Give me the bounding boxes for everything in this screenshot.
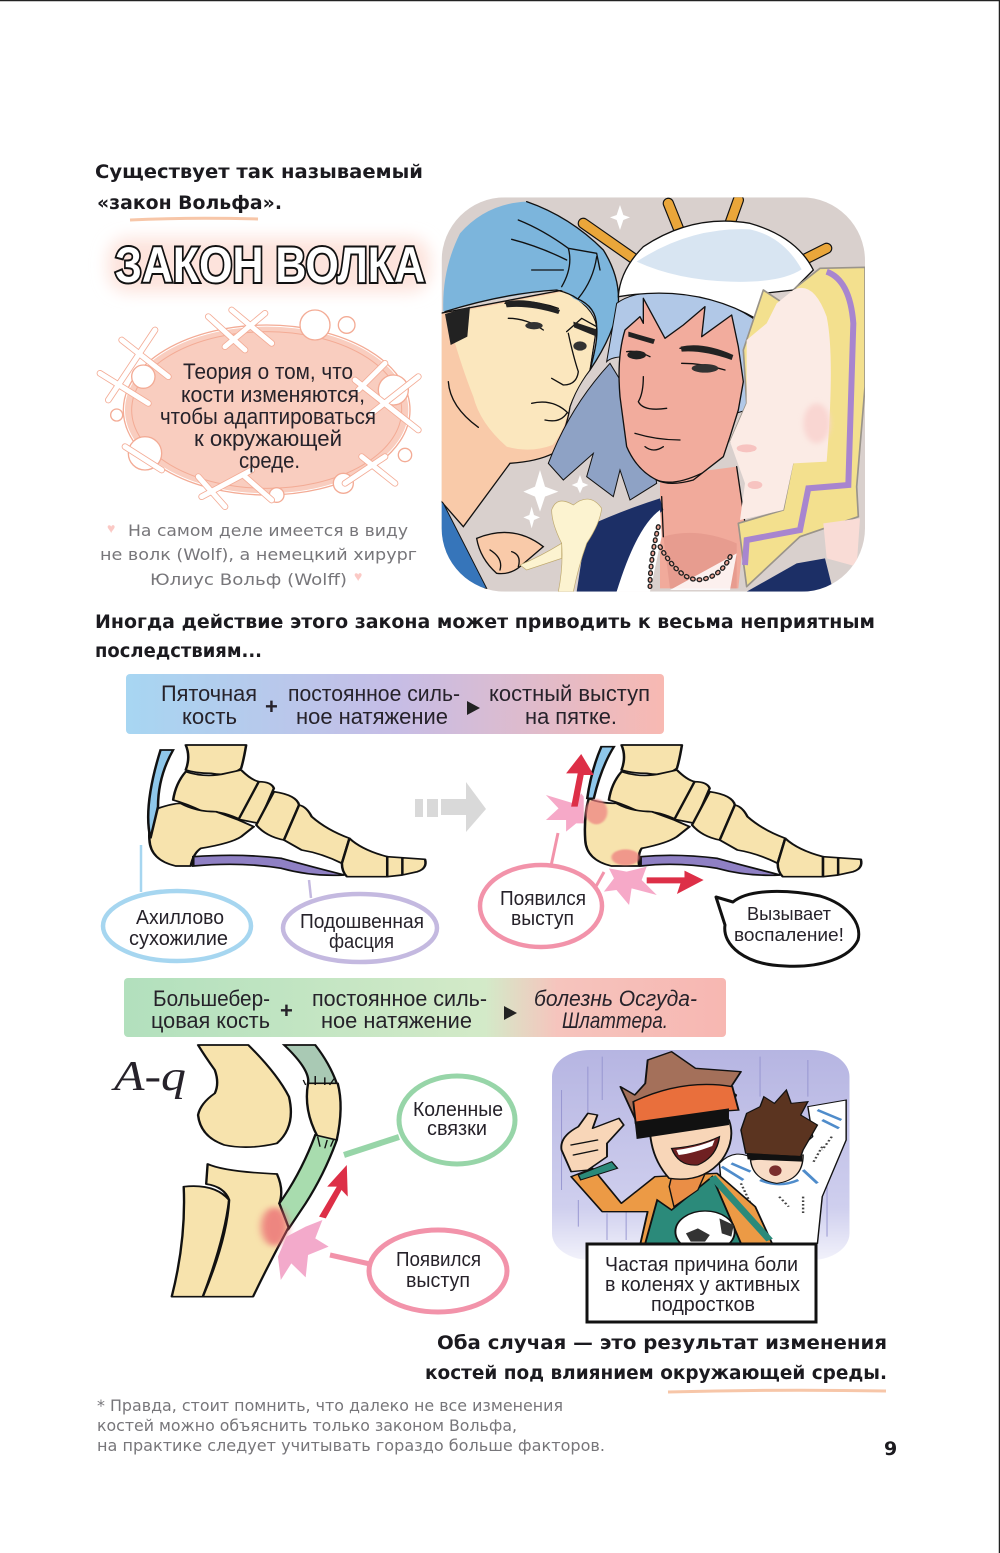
- definition text: к окружающей: [194, 426, 342, 451]
- footnote: на практике следует учитывать гораздо больше факторов.: [97, 1436, 605, 1455]
- conclusion: костей под влиянием окружающей среды.: [425, 1362, 887, 1384]
- formula banner: heel: [126, 674, 664, 734]
- label: achilles tendon: [103, 891, 251, 961]
- left man: [440, 202, 618, 588]
- arrow between feet: [415, 782, 486, 832]
- intro heading: «закон Вольфа».: [97, 192, 282, 214]
- intro heading: Существует так называемый: [95, 161, 423, 183]
- label: plantar fascia: [283, 894, 437, 962]
- intro heading: [95, 161, 423, 220]
- label: knee ligaments: связки: [427, 1118, 487, 1140]
- note about Wolff: Юлиус Вольф (Wolff): [150, 570, 347, 589]
- label: knee spur appeared: Появился: [396, 1249, 481, 1271]
- formula banner: heel: ное натяжение: [296, 704, 448, 729]
- definition text: кости изменяются,: [181, 382, 365, 407]
- footnote: * Правда, стоит помнить, что далеко не все изменения: [97, 1396, 563, 1415]
- caption box: Частая причина боли: [605, 1254, 798, 1276]
- label: achilles tendon: сухожилие: [129, 928, 228, 950]
- conclusion: [425, 1332, 887, 1392]
- bone-pattern ellipse with definition: [100, 310, 418, 507]
- right man: [548, 292, 833, 592]
- afterimage silhouette: [730, 267, 865, 587]
- label: plantar fascia: фасция: [329, 931, 394, 953]
- footnote: костей можно объяснить только законом Вольфа,: [97, 1416, 517, 1435]
- label: knee ligaments: Коленные: [413, 1099, 503, 1121]
- page number: 9: [884, 1438, 897, 1460]
- conclusion: Оба случая — это результат изменения: [437, 1332, 887, 1354]
- speech bubble: inflammation: воспаление!: [734, 925, 844, 945]
- spiked hat: [583, 200, 827, 320]
- caption box: в коленях у активных: [605, 1274, 800, 1296]
- label: knee spur appeared: выступ: [406, 1270, 470, 1292]
- formula banner: knee: ное натяжение: [321, 1008, 472, 1033]
- formula banner: heel: на пятке.: [525, 704, 617, 729]
- leader: ligament: [344, 1137, 399, 1155]
- first boy: [561, 1052, 772, 1252]
- formula banner: knee: Шлаттера.: [562, 1008, 668, 1033]
- formula banner: heel: кость: [182, 704, 237, 729]
- note about Wolff: ♥: [354, 568, 362, 584]
- note about Wolff: [100, 520, 417, 589]
- formula banner: knee: [124, 978, 726, 1037]
- pink star: lower: [604, 867, 657, 905]
- definition text: Теория о том, что: [183, 359, 353, 384]
- note about Wolff: не волк (Wolf), а немецкий хирург: [100, 545, 417, 564]
- title: wolf law: ЗАКОН ВОЛКА: [115, 237, 425, 293]
- speech bubble: inflammation: Вызывает: [747, 904, 831, 924]
- illustration: two men with bone: [440, 197, 865, 592]
- illustration: teenage footballers: [552, 1050, 849, 1260]
- foot diagram: with bone spurs: [546, 745, 861, 905]
- leader: knee spur: [330, 1255, 370, 1264]
- formula banner: heel: Пяточная: [161, 681, 257, 706]
- hand holding bone: [477, 205, 630, 592]
- second heading: [95, 611, 875, 662]
- speech bubble: inflammation: [716, 891, 859, 966]
- formula banner: heel: +: [265, 694, 278, 719]
- definition text: [160, 359, 376, 473]
- note about Wolff: ♥: [107, 520, 115, 536]
- knee diagram: [172, 1045, 348, 1297]
- foot diagram: normal: [148, 745, 426, 877]
- second heading: Иногда действие этого закона может приводить к весьма неприятным: [95, 611, 875, 633]
- formula banner: heel: постоянное силь-: [288, 681, 460, 706]
- caption box: [587, 1244, 816, 1322]
- formula banner: knee: Большебер-: [153, 986, 270, 1011]
- formula banner: knee: постоянное силь-: [312, 986, 487, 1011]
- pink star: upper: [546, 793, 584, 832]
- formula banner: heel: костный выступ: [489, 681, 650, 706]
- label: plantar fascia: Подошвенная: [300, 911, 424, 933]
- label: knee ligaments: [399, 1076, 515, 1164]
- definition text: чтобы адаптироваться: [160, 404, 376, 429]
- label: spur appeared: Появился: [500, 888, 586, 910]
- note about Wolff: На самом деле имеется в виду: [128, 521, 408, 540]
- formula banner: knee: цовая кость: [151, 1008, 270, 1033]
- label: achilles tendon: Ахиллово: [136, 907, 224, 929]
- label: spur appeared: [480, 865, 602, 947]
- red arrow: [319, 1165, 348, 1218]
- label: spur appeared: выступ: [511, 908, 574, 930]
- red arrow: up: [566, 754, 594, 807]
- footnote: [97, 1396, 605, 1455]
- formula banner: knee: +: [280, 998, 293, 1023]
- definition text: среде.: [239, 448, 300, 473]
- pink star: [278, 1220, 329, 1280]
- caption box: подростков: [651, 1294, 755, 1316]
- second boy: [719, 1090, 846, 1243]
- label: A-q handwritten: A-q: [110, 1054, 186, 1100]
- formula banner: knee: болезнь Осгуда-: [534, 986, 697, 1011]
- leader lines: [140, 845, 142, 892]
- red arrow: right: [647, 871, 704, 894]
- second heading: последствиям...: [95, 640, 262, 662]
- label: knee spur appeared: [369, 1230, 507, 1312]
